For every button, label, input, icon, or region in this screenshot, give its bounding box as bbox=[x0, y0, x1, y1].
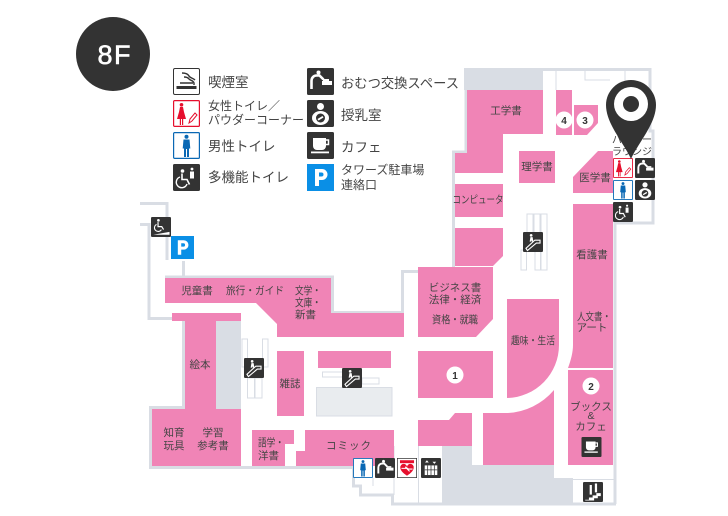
icon: multipurpose restroom bbox=[173, 164, 200, 191]
icon: location pin bbox=[606, 80, 656, 159]
legend label: cafe: カフェ bbox=[341, 140, 382, 155]
escalators and void bbox=[242, 214, 547, 416]
lounge label: パウダー bbox=[612, 133, 652, 146]
store labels: 洋書 bbox=[258, 449, 279, 462]
store labels: 看護書 bbox=[576, 248, 608, 261]
badge: floor 8F: 8F bbox=[98, 40, 130, 70]
store labels: 児童書 bbox=[181, 284, 213, 297]
badge: floor 8F bbox=[76, 17, 150, 91]
store labels: 学習 bbox=[202, 426, 224, 439]
numbered stores: 3 bbox=[582, 116, 588, 127]
store labels: 趣味・生活 bbox=[511, 334, 555, 347]
legend label: smoking room: 喫煙室 bbox=[208, 75, 248, 90]
icon: nursing room bbox=[307, 100, 334, 127]
icon: cafe bbox=[307, 132, 334, 159]
legend label: diaper changing: おむつ交換スペース bbox=[341, 76, 459, 91]
icon: parking bbox=[307, 164, 334, 191]
legend label: powder corner: パウダーコーナー bbox=[208, 112, 304, 127]
store labels: ブックス bbox=[570, 400, 612, 413]
store labels: 文学・ bbox=[295, 284, 321, 297]
legend label: women's restroom: 女性トイレ／ bbox=[208, 99, 280, 113]
icon: diaper changing bbox=[307, 68, 334, 95]
store labels: & bbox=[587, 410, 595, 422]
store labels: 新書 bbox=[295, 308, 316, 321]
lounge label: ラウンジ bbox=[612, 146, 652, 158]
store labels: コンピュータ bbox=[452, 194, 504, 206]
numbered stores: 4 bbox=[561, 116, 567, 127]
store labels: コミック bbox=[326, 440, 372, 452]
store labels: 参考書 bbox=[197, 439, 229, 452]
lounge icons bbox=[613, 158, 655, 222]
store labels: 医学書 bbox=[579, 171, 611, 184]
icon: smoking room bbox=[174, 68, 200, 94]
legend label: men's restroom: 男性トイレ bbox=[208, 139, 276, 154]
store labels: 文庫・ bbox=[295, 296, 321, 309]
legend label: parking connection: タワーズ駐車場 bbox=[341, 162, 424, 177]
legend bbox=[173, 68, 459, 192]
floor plan outline and structure bbox=[140, 68, 653, 504]
legend label: multipurpose restroom: 多機能トイレ bbox=[208, 170, 289, 185]
icon: men's restroom bbox=[174, 133, 199, 158]
numbered stores: 1 bbox=[452, 371, 458, 382]
store labels: 雑誌 bbox=[280, 377, 301, 390]
lounge label bbox=[612, 133, 652, 158]
store labels: 玩具 bbox=[164, 440, 185, 452]
numbered stores: 2 bbox=[588, 382, 594, 393]
store labels: 旅行・ガイド bbox=[226, 284, 284, 297]
store labels bbox=[164, 104, 612, 462]
store areas (pink) bbox=[152, 90, 613, 466]
store labels: 工学書 bbox=[490, 104, 522, 117]
legend label: nursing room: 授乳室 bbox=[341, 108, 382, 123]
store labels: 絵本 bbox=[190, 358, 211, 371]
legend label: parking connection line 2: 連絡口 bbox=[341, 178, 377, 192]
store labels: 人文書・ bbox=[577, 310, 611, 323]
store labels: 資格・就職 bbox=[432, 313, 478, 326]
store labels: カフェ bbox=[575, 421, 607, 433]
icon: women's restroom bbox=[174, 101, 199, 126]
store labels: 知育 bbox=[164, 426, 184, 439]
store labels: 語学・ bbox=[258, 436, 284, 449]
store labels: ビジネス書 bbox=[429, 281, 481, 294]
store labels: アート bbox=[577, 322, 607, 334]
map icons bbox=[151, 217, 603, 502]
numbered stores bbox=[446, 112, 600, 394]
store labels: 理学書 bbox=[521, 160, 553, 173]
store labels: 法律・経済 bbox=[429, 293, 482, 306]
